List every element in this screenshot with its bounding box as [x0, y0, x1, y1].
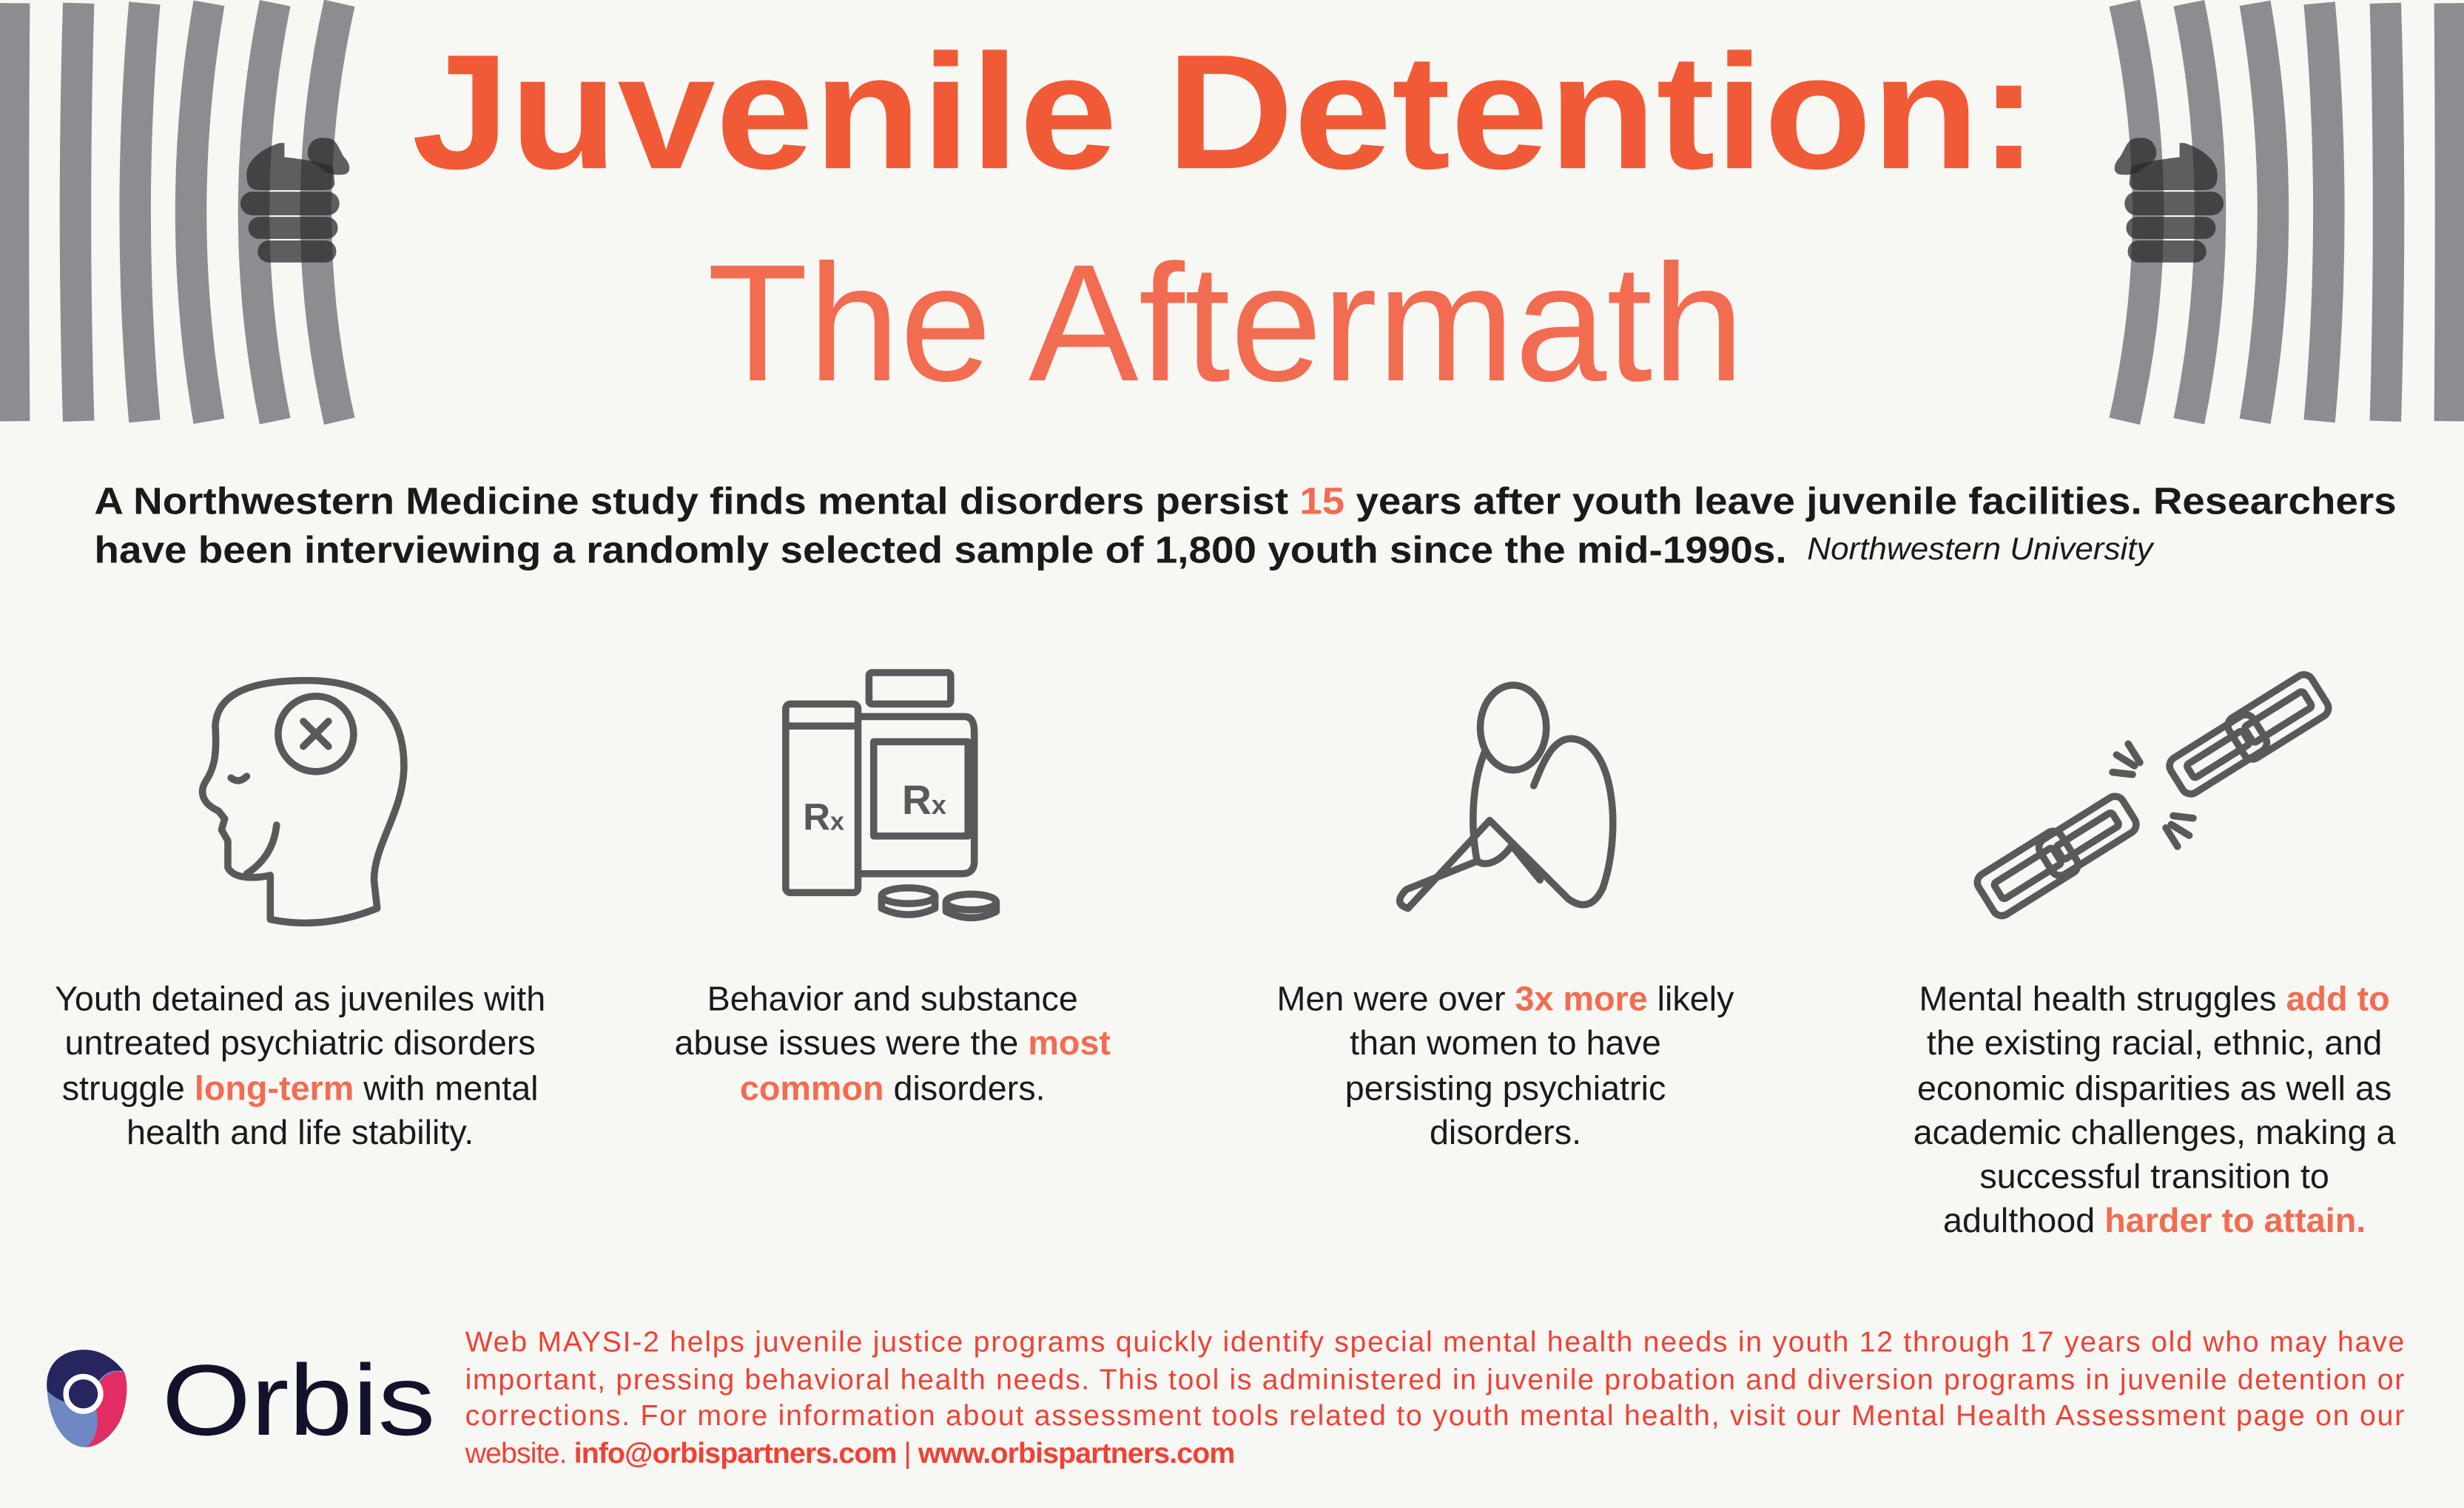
- text block: column 3: than women to have: [1350, 1023, 1661, 1062]
- text block: column 1: health and life stability.: [127, 1113, 474, 1151]
- text block: column 2: common disorders.: [740, 1069, 1046, 1108]
- icon: broken chain: [1956, 643, 2349, 947]
- subtitle: The Aftermath: [707, 229, 1744, 416]
- text block: column 4: academic challenges, making a: [1913, 1113, 2396, 1151]
- decoration: left prison bars with fist: [13, 3, 349, 421]
- logo: Orbis: [47, 1344, 435, 1456]
- text block: column 4: [1913, 980, 2396, 1239]
- title: Juvenile Detention:: [411, 20, 2038, 203]
- text block: column 1: Youth detained as juveniles with: [55, 980, 545, 1018]
- icon: head with X: [203, 681, 404, 923]
- intro text block: have been interviewing a randomly selected sample of 1,800 youth since the mid-1990s.: [94, 528, 1787, 570]
- text block: column 3: persisting psychiatric: [1345, 1069, 1666, 1108]
- footer text block: [465, 1325, 2404, 1470]
- text block: column 4: the existing racial, ethnic, and: [1927, 1023, 2382, 1062]
- text block: column 2: [675, 980, 1111, 1108]
- text block: column 4: economic disparities as well as: [1917, 1069, 2391, 1108]
- icon: prescription bottles: Rx: [902, 777, 946, 823]
- text block: column 3: Men were over 3x more likely: [1277, 980, 1734, 1018]
- text block: column 3: disorders.: [1430, 1113, 1581, 1151]
- text block: column 4: adulthood harder to attain.: [1943, 1201, 2366, 1239]
- text block: column 3: [1277, 980, 1734, 1151]
- intro text block: Northwestern University: [1807, 531, 2155, 566]
- text block: column 2: Behavior and substance: [707, 980, 1078, 1018]
- text block: column 1: untreated psychiatric disorders: [65, 1023, 536, 1062]
- icon: crouching person: [1400, 685, 1613, 909]
- logo: Orbis: Orbis: [162, 1344, 435, 1456]
- text block: column 1: [55, 980, 545, 1151]
- icon: prescription bottles: [786, 673, 996, 918]
- decoration: right prison bars with fist: [2115, 3, 2451, 421]
- text block: column 1: struggle long-term with mental: [62, 1069, 539, 1108]
- text block: column 2: abuse issues were the most: [675, 1023, 1111, 1062]
- intro text block: A Northwestern Medicine study finds mental disorders persist 15 years after youth leave juvenile facilities. Researchers: [94, 479, 2397, 522]
- icon: left fist: [240, 138, 349, 263]
- text block: column 4: successful transition to: [1979, 1157, 2329, 1196]
- text block: column 4: Mental health struggles add to: [1919, 980, 2390, 1018]
- footer text block: website. info@orbispartners.com | www.orbispartners.com: [465, 1437, 1235, 1470]
- footer text block: important, pressing behavioral health needs. This tool is administered in juvenile probation and diversion programs in juvenile detention or: [465, 1363, 2404, 1396]
- intro text block: [94, 479, 2397, 570]
- footer text block: Web MAYSI-2 helps juvenile justice programs quickly identify special mental health needs in youth 12 through 17 years old who may have: [465, 1325, 2404, 1358]
- icon: prescription bottles: Rx: [803, 795, 844, 838]
- footer text block: corrections. For more information about assessment tools related to youth mental health, visit our Mental Health Assessment page on our: [465, 1399, 2404, 1432]
